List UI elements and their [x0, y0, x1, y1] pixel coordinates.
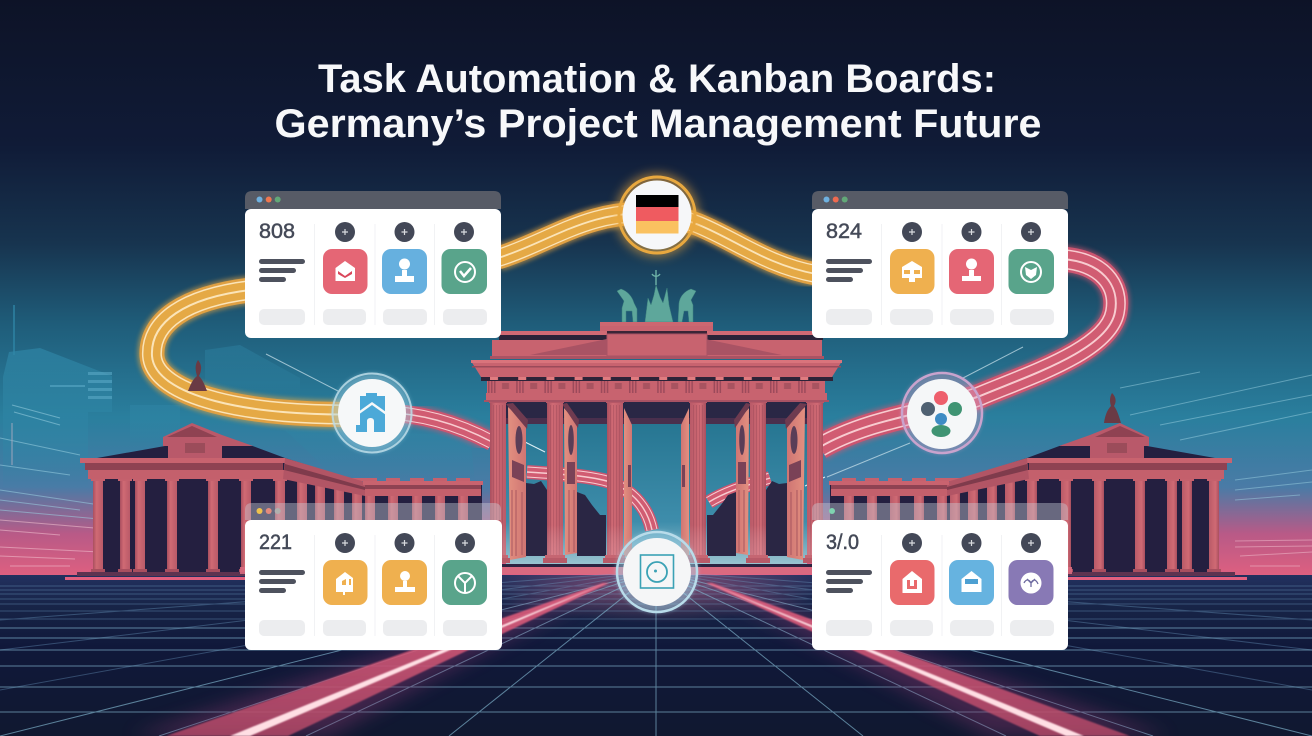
- left classical building: [65, 423, 495, 580]
- add buttons: [335, 222, 474, 242]
- floor perspective grid near: [0, 571, 1312, 736]
- card body: [812, 520, 1068, 650]
- gate columns and walls: [486, 400, 827, 563]
- icon tile: person: [949, 249, 994, 294]
- icon tile: home: [949, 560, 994, 605]
- attic: [490, 322, 824, 359]
- ribbon: pink left: [372, 412, 492, 442]
- kanban card: 221: [245, 503, 502, 650]
- add buttons: [902, 533, 1041, 553]
- icon tile: badge: [1008, 249, 1054, 294]
- empty pills: [826, 620, 1054, 636]
- empty pills: [259, 309, 487, 325]
- urn on the right building: [1104, 393, 1121, 423]
- icon tile: helmet: [890, 249, 934, 294]
- card number: 221: [259, 531, 292, 554]
- left light streaks: [0, 405, 120, 566]
- icon tile: upload house: [890, 560, 934, 605]
- icon: coloured circles: [921, 391, 962, 437]
- node: landmark: [332, 373, 412, 453]
- card body: [245, 209, 501, 338]
- plus glyphs: [909, 540, 1034, 546]
- window title bar: [812, 503, 1068, 520]
- kanban card: 808: [245, 191, 501, 338]
- window title bar: [245, 191, 501, 209]
- icon: square target: [640, 555, 674, 588]
- platform glow line: [240, 567, 1072, 574]
- icon tile: network: [1008, 560, 1054, 605]
- background sky: [0, 0, 1312, 580]
- card body: [245, 520, 502, 650]
- column dividers: [882, 535, 1002, 636]
- icon tile: mail: [323, 249, 368, 294]
- column dividers: [314, 224, 434, 325]
- window title bar: [812, 191, 1068, 209]
- right light streaks: [1120, 372, 1312, 566]
- node: German flag: [615, 173, 699, 257]
- icon tile: clock: [442, 560, 487, 605]
- title: Task Automation & Kanban Boards:: [318, 57, 996, 101]
- ribbon: pink right loop: [820, 259, 1116, 447]
- icon: flag: [636, 195, 678, 234]
- sky through the gate: [506, 420, 807, 565]
- right classical building: [817, 423, 1247, 580]
- thin connector lines: [266, 347, 1023, 477]
- kanban card: 824: [812, 191, 1068, 338]
- icon tile: person: [382, 249, 427, 294]
- quadriga sculpture: [617, 270, 696, 322]
- title: [274, 57, 1042, 146]
- floor perspective grid far: [0, 571, 1312, 690]
- empty pills: [259, 620, 487, 636]
- ribbons behind the gate: [525, 442, 825, 530]
- Brandenburg Gate: [471, 270, 842, 567]
- card number: 808: [259, 220, 295, 243]
- pink light streaks on the floor: [130, 583, 1170, 736]
- icon tile: stamp: [382, 560, 427, 605]
- kanban card: 3/.0: [812, 503, 1068, 650]
- text lines: [826, 259, 872, 282]
- plus glyphs: [342, 229, 467, 235]
- text lines: [259, 570, 305, 593]
- lintel under the entablature: [506, 402, 807, 424]
- empty pills: [826, 309, 1054, 325]
- urn behind the left building: [188, 360, 207, 391]
- left ghost skyline: [3, 305, 475, 490]
- icon: gate building: [356, 393, 386, 432]
- title: Germany’s Project Management Future: [274, 102, 1042, 146]
- icon tile: check: [442, 249, 487, 294]
- text lines: [826, 570, 872, 593]
- card number: 824: [826, 220, 862, 243]
- add buttons: [335, 533, 475, 553]
- floor: [0, 575, 1312, 736]
- column dividers: [314, 535, 434, 636]
- column dividers: [882, 224, 1002, 325]
- floor glow: [486, 547, 826, 623]
- ribbon: gold top arc: [498, 213, 816, 274]
- plus glyphs: [909, 229, 1034, 235]
- gate plinth: [490, 564, 822, 567]
- node: target: [616, 531, 698, 613]
- text lines: [259, 259, 305, 282]
- card body: [812, 209, 1068, 338]
- node: team: [901, 372, 983, 454]
- entablature cornice: [471, 360, 842, 402]
- ribbon: gold left loop: [152, 290, 372, 414]
- plus glyphs: [342, 540, 468, 546]
- icon tile: house: [323, 560, 368, 605]
- window title bar: [245, 503, 501, 520]
- add buttons: [902, 222, 1041, 242]
- card number: 3/.0: [826, 531, 859, 554]
